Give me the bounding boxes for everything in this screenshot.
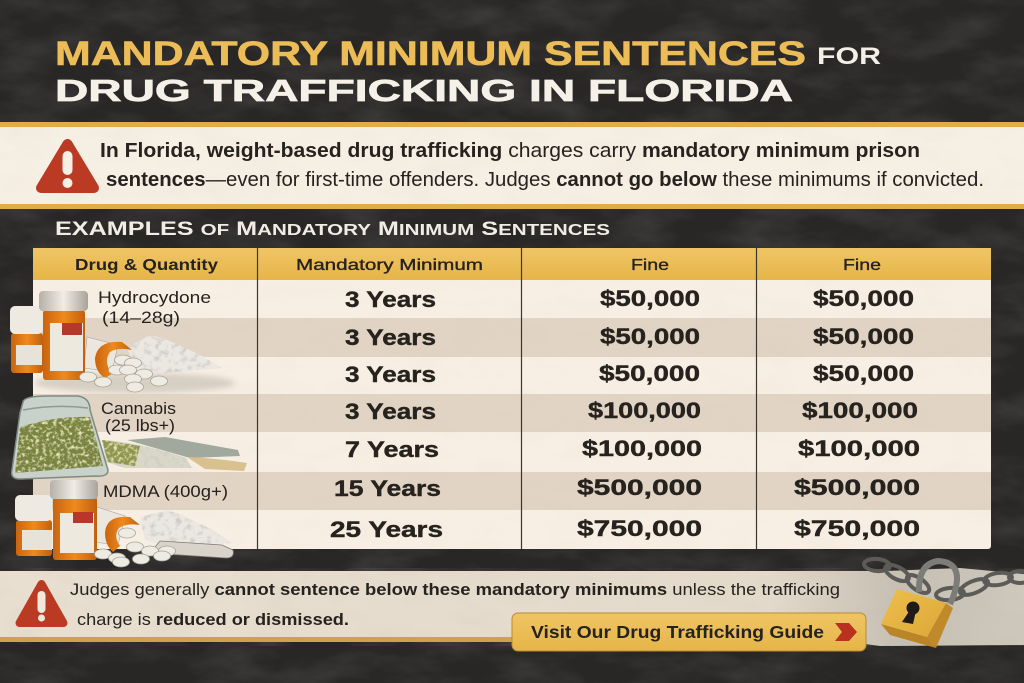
row 6 <box>334 475 920 501</box>
row 5: $100,000 <box>798 436 920 461</box>
button: visit guide: Visit Our Drug Trafficking Guide <box>531 622 824 642</box>
icon: warning triangle small <box>20 584 64 623</box>
row 1: $50,000 <box>600 286 700 311</box>
drug labels: MDMA (400g+) <box>103 483 228 501</box>
section heading: EXAMPLES OF M ANDATORY M INIMUM S ENTENCES <box>55 219 610 240</box>
row 1: 3 Years <box>345 287 436 312</box>
icon: chevron arrow <box>835 623 857 641</box>
title: FOR <box>817 43 881 70</box>
title: MANDATORY MINIMUM SENTENCES <box>55 35 806 73</box>
drug labels: Cannabis <box>101 400 176 418</box>
note text: Judges generally cannot sentence below these mandatory minimums unless the trafficking <box>70 581 840 599</box>
table header: Drug & Quantity <box>75 257 218 274</box>
table <box>33 248 991 549</box>
drug labels <box>98 289 228 501</box>
row 6: $500,000 <box>794 475 920 500</box>
drug labels: Hydrocydone <box>98 289 211 307</box>
illustration: hydrocodone bottles and pills <box>10 291 235 393</box>
row 2: $50,000 <box>600 324 700 349</box>
bottom banner <box>0 568 1024 646</box>
row 3: 3 Years <box>345 362 436 387</box>
drug labels: (25 lbs+) <box>105 417 175 435</box>
row 1 <box>345 286 914 312</box>
row 3: $50,000 <box>599 361 700 386</box>
row 7: 25 Years <box>330 517 443 542</box>
row 2: $50,000 <box>813 324 914 349</box>
row 5: 7 Years <box>345 437 439 462</box>
illustration: cannabis bag <box>12 396 247 479</box>
table header: Fine <box>631 257 669 274</box>
row 2 <box>345 324 914 350</box>
row 7: $750,000 <box>794 516 920 541</box>
row 4: $100,000 <box>588 398 701 423</box>
row shading <box>33 280 991 549</box>
title <box>55 35 881 108</box>
intro text: In Florida, weight-based drug trafficking charges carry mandatory minimum prison <box>100 139 920 162</box>
row 6: 15 Years <box>334 476 441 501</box>
intro text: sentences—even for first-time offenders. Judges cannot go below these minimums if convicted. <box>106 168 984 191</box>
row 3: $50,000 <box>813 361 914 386</box>
icon: warning triangle <box>41 144 94 188</box>
intro banner <box>0 122 1024 209</box>
row 4: 3 Years <box>345 399 436 424</box>
table header: Fine <box>843 257 881 274</box>
drug labels: (14–28g) <box>102 309 180 327</box>
note text: charge is reduced or dismissed. <box>77 611 349 629</box>
row 4 <box>345 398 918 424</box>
row 7: $750,000 <box>577 516 702 541</box>
button: visit guide <box>512 613 866 651</box>
row 1: $50,000 <box>813 286 914 311</box>
row 3 <box>345 361 914 387</box>
row 7 <box>330 516 920 542</box>
note text <box>70 581 840 629</box>
table header: Mandatory Minimum <box>296 257 483 274</box>
illustration: MDMA bottles and pills <box>15 480 233 567</box>
row 2: 3 Years <box>345 325 436 350</box>
intro text <box>100 139 984 191</box>
row 5 <box>345 436 920 462</box>
row 5: $100,000 <box>582 436 702 461</box>
row 4: $100,000 <box>802 398 918 423</box>
row 6: $500,000 <box>577 475 702 500</box>
title: DRUG TRAFFICKING IN FLORIDA <box>55 73 793 108</box>
icon: padlock and chain <box>864 558 1024 648</box>
table header <box>33 248 991 280</box>
